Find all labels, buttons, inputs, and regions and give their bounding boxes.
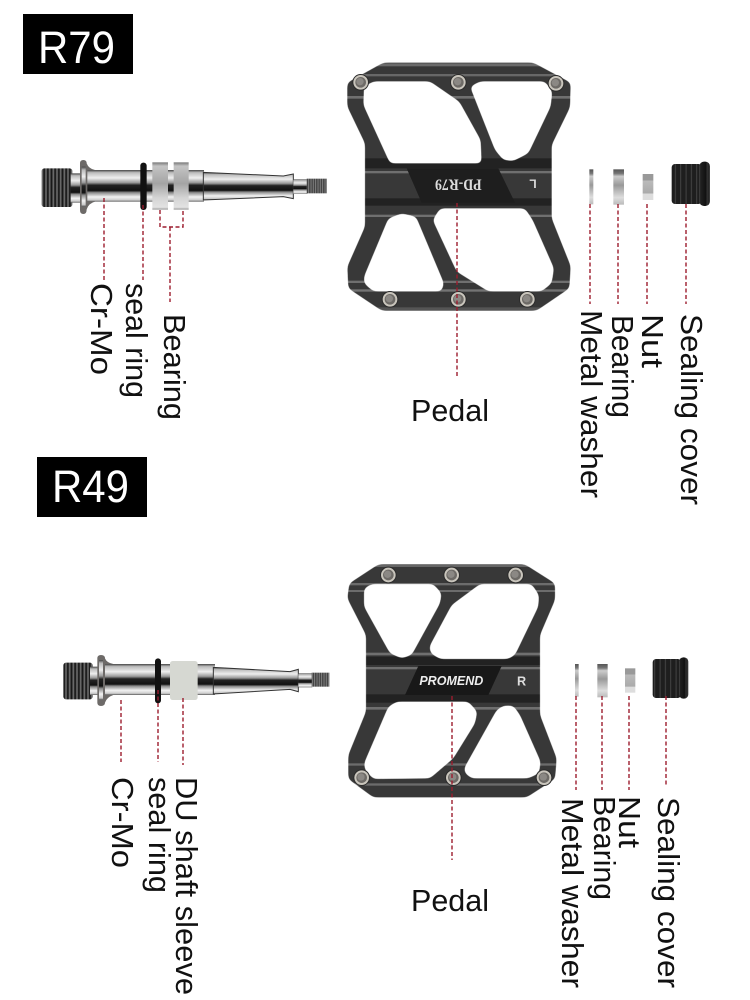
R49 pedal [348,564,557,798]
R49 label: Metal washer: Metal washer [555,798,590,988]
R49 pedal: R [517,675,526,689]
R79 small parts [589,162,710,206]
R49 label: seal ring: seal ring [142,777,177,893]
R79 spindle [42,160,327,214]
R49 small parts [575,657,688,699]
R79 label: seal ring: seal ring [119,283,154,398]
R79 label: Nut: Nut [635,314,670,368]
R79 pedal: L [529,176,537,190]
R79 label: Metal washer: Metal washer [574,310,609,498]
R79 leader lines [104,198,686,376]
R79 label: Bearing: Bearing [157,314,192,420]
R49 spindle [63,655,329,706]
R79 label: Cr-Mo: Cr-Mo [84,283,119,375]
label badge: R49: R49 [52,461,129,512]
label badge: R79: R79 [38,22,115,73]
R49 label: Cr-Mo: Cr-Mo [105,777,140,868]
R79 pedal: PD-R79 [435,175,482,192]
R49 label: Pedal: Pedal [411,883,489,918]
R49 label: DU shaft sleeve: DU shaft sleeve [169,777,204,995]
R79 label: Pedal: Pedal [411,393,489,428]
R49 label: Sealing cover: Sealing cover [651,797,686,988]
R79 label: Bearing nut side: Bearing [605,315,640,418]
R49 label: Bearing: Bearing [587,796,622,900]
R79 label: Sealing cover: Sealing cover [674,314,709,505]
R49 pedal: PROMEND [419,673,484,688]
R49 leader lines [121,690,666,860]
label badge: R79 [23,14,133,74]
R79 pedal [347,62,571,311]
R49 label: Nut: Nut [612,796,647,848]
label badge: R49 [37,457,147,517]
